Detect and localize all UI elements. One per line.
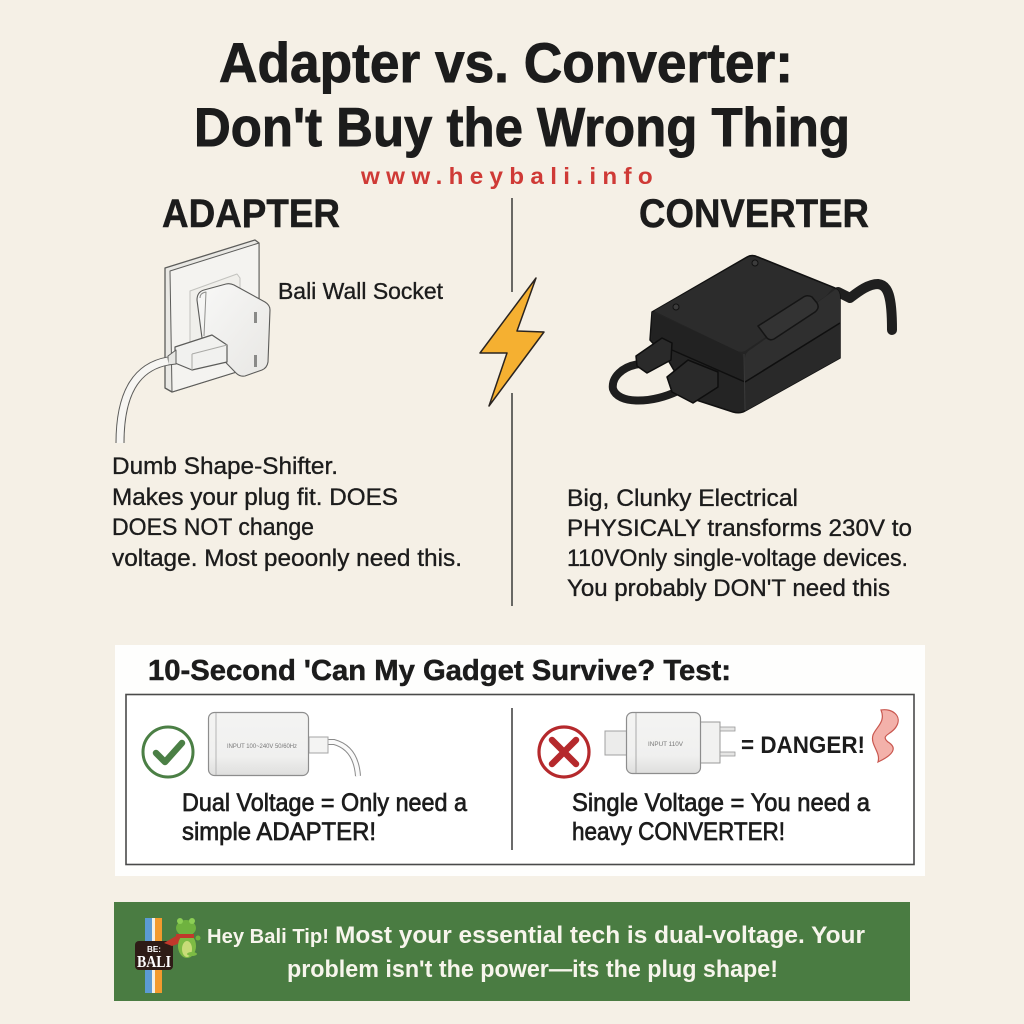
icon: adapter in wall socket — [120, 240, 270, 443]
text: dual voltage — [182, 789, 467, 846]
center divider — [511, 198, 513, 606]
text: danger: = DANGER! — [741, 732, 865, 759]
logo: be bali stripes: BALI — [137, 952, 171, 971]
text: dual voltage: simple ADAPTER! — [182, 818, 376, 846]
text: dual voltage: Dual Voltage = Only need a — [182, 789, 467, 817]
tip text: Most your essential tech is dual-voltage. Your — [335, 922, 865, 949]
tip text — [207, 922, 865, 983]
test box frame — [126, 694, 914, 864]
icon: dual voltage charger: INPUT 100~240V 50/60Hz — [227, 743, 297, 750]
icon: frog mascot — [164, 918, 200, 958]
text: adapter description — [112, 453, 462, 572]
text: adapter description: Dumb Shape-Shifter. — [112, 453, 338, 480]
heading: adapter: ADAPTER — [162, 192, 340, 236]
title — [194, 31, 850, 158]
title: Adapter vs. Converter: — [219, 31, 793, 94]
label: bali wall socket: Bali Wall Socket — [278, 278, 444, 304]
text: single voltage — [572, 789, 870, 846]
icon: lightning bolt — [480, 278, 544, 406]
heading: converter: CONVERTER — [639, 192, 869, 236]
panel: hey bali tip — [114, 902, 910, 1001]
text: single voltage: heavy CONVERTER! — [572, 818, 785, 846]
text: adapter description: DOES NOT change — [112, 514, 314, 541]
icon: green check — [143, 727, 193, 777]
text: single voltage: Single Voltage = You need a — [572, 789, 870, 817]
column divider — [511, 708, 513, 850]
text: converter description — [567, 485, 912, 602]
icon: dual voltage charger — [208, 712, 358, 776]
icon: red cross — [539, 727, 589, 777]
tip text: Hey Bali Tip! — [207, 926, 329, 948]
icon: smoke — [872, 710, 898, 762]
text: adapter description: voltage. Most peoonly need this. — [112, 545, 462, 572]
text: converter description: 110VOnly single-voltage devices. — [567, 545, 908, 572]
logo: be bali stripes — [135, 918, 173, 993]
icon: single voltage charger: INPUT 110V — [648, 741, 684, 748]
text: converter description: Big, Clunky Electrical — [567, 485, 798, 512]
text: adapter description: Makes your plug fit. DOES — [112, 484, 398, 511]
text: converter description: You probably DON'T need this — [567, 575, 890, 602]
icon: single voltage charger — [605, 712, 735, 774]
icon: converter box — [613, 256, 892, 413]
logo: be bali stripes: BE: — [147, 945, 161, 954]
website url: www.heybali.info — [360, 163, 659, 189]
panel heading: 10-Second 'Can My Gadget Survive? Test: — [148, 655, 731, 687]
title: Don't Buy the Wrong Thing — [194, 96, 850, 158]
text: converter description: PHYSICALY transforms 230V to — [567, 515, 912, 542]
tip text: problem isn't the power—its the plug shape! — [287, 956, 778, 983]
panel: gadget survival test — [115, 645, 925, 876]
